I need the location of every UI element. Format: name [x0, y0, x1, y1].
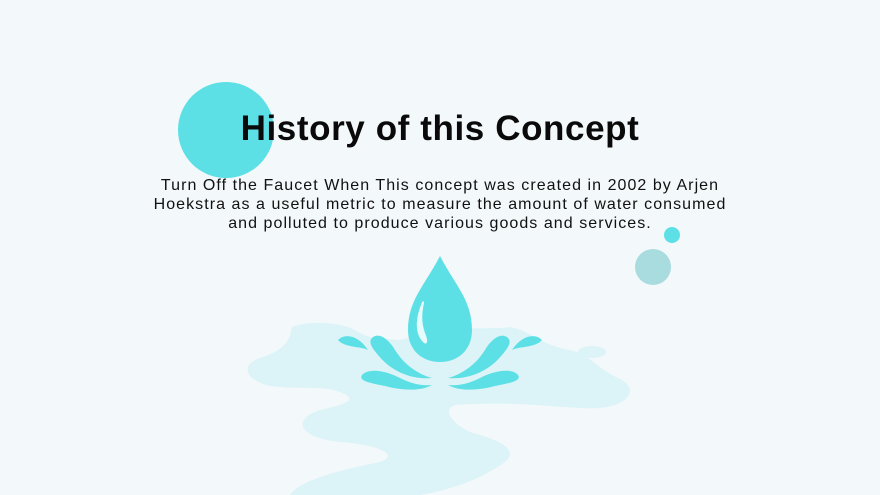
body text: Hoekstra as a useful metric to measure the amount of water consumed — [154, 196, 726, 213]
decorative circle large — [178, 82, 274, 178]
body text: and polluted to produce various goods and services. — [228, 215, 652, 232]
puddle — [248, 323, 630, 495]
drop — [408, 256, 472, 362]
body text: Turn Off the Faucet When This concept was created in 2002 by Arjen — [161, 177, 719, 194]
title: History of this Concept — [241, 109, 639, 148]
body text — [154, 177, 726, 232]
splashes — [338, 336, 542, 390]
